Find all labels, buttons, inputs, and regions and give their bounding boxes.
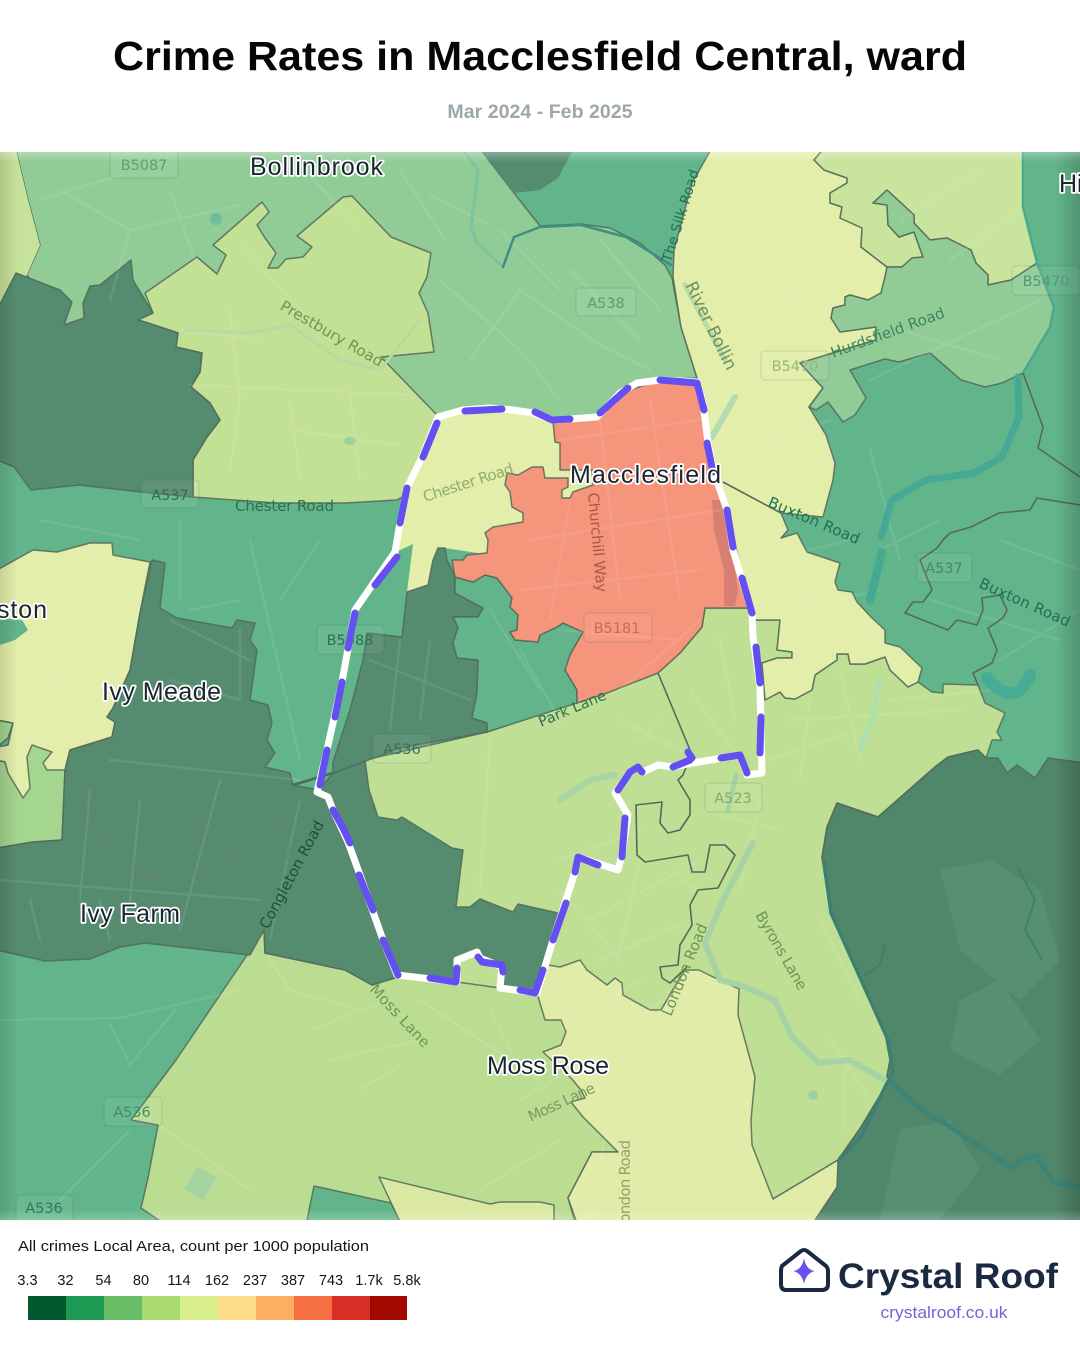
legend: [17, 1238, 421, 1320]
legend scale values: 54: [95, 1273, 112, 1289]
road name labels: River Bollin: [681, 278, 741, 373]
website: crystalroof.co.uk: [880, 1304, 1008, 1322]
road shield labels under ward line: B5087: [121, 158, 167, 174]
area: north-east yellow green: [814, 146, 1037, 285]
legend scale values: 387: [281, 1273, 305, 1289]
legend scale values: 743: [319, 1273, 343, 1289]
road shield labels under ward line: A536: [383, 742, 421, 758]
road shield labels under ward line: B5470: [1023, 274, 1069, 290]
road name labels: Chester Road: [421, 460, 516, 506]
legend scale values: 237: [243, 1273, 267, 1289]
area: top dark green: [483, 152, 572, 193]
road name labels: Moss Lane: [525, 1079, 598, 1126]
road shield labels under ward line: A536: [113, 1105, 151, 1121]
road name labels: Chester Road: [235, 497, 334, 515]
icon: house with star: [781, 1250, 828, 1290]
railway strip: [712, 500, 738, 606]
boundary lines: [85, 373, 1080, 983]
rivers and water: [184, 152, 1080, 1200]
road name labels: Buxton Road: [765, 493, 863, 548]
road shield labels under ward line: A537: [151, 488, 189, 504]
area: south mid green patch: [306, 1185, 399, 1220]
road shield labels under ward line: A523: [714, 791, 752, 807]
road name labels: Moss Lane: [366, 980, 434, 1051]
area: small green blob behind ston: [0, 618, 28, 646]
road name labels: Hurdsfield Road: [828, 304, 947, 362]
edge vignettes: [0, 152, 1080, 1220]
road name labels: London Road: [658, 921, 711, 1018]
legend colour bar: [28, 1296, 407, 1320]
legend scale values: 3.3: [17, 1273, 38, 1289]
area: pale yellow Ivy Meade west: [0, 543, 150, 798]
road shield labels under ward line: A538: [587, 296, 625, 312]
road name labels: Byrons Lane: [752, 908, 811, 993]
area: central green beside red area: [453, 575, 583, 732]
area: large dark green Ivy Farm: [0, 560, 558, 993]
road name labels: Churchill Way: [584, 492, 611, 593]
area: central dark green: [333, 548, 487, 773]
legend title: All crimes Local Area, count per 1000 population: [18, 1238, 369, 1255]
area: south-east lighter patches: [880, 860, 1060, 1220]
area: west dark green: [0, 260, 220, 497]
wordmark: Crystal Roof: [838, 1257, 1058, 1296]
area: south pale yellow: [537, 960, 838, 1226]
area: south pale patch: [379, 1177, 554, 1226]
road shield labels under ward line: B5181: [594, 621, 640, 637]
area: top-left yellow green: [0, 146, 40, 314]
area: ward high crime salmon: [452, 380, 750, 703]
road name labels: [235, 168, 1073, 1230]
place name labels: Moss Rose: [487, 1052, 609, 1080]
road name labels: Park Lane: [536, 688, 609, 731]
road shield labels under ward line: A537: [925, 561, 963, 577]
area: south and centre yellow green: [340, 608, 1005, 1199]
legend scale values: 80: [133, 1273, 149, 1289]
place name labels: Macclesfield: [570, 461, 721, 489]
area: Prestbury yellow green: [138, 196, 437, 503]
road name labels: Congleton Road: [256, 817, 328, 932]
area: ward interior north-west pale yellow: [396, 408, 600, 592]
area: light green lower-left: [0, 720, 65, 848]
place name labels: Ivy Farm: [80, 900, 180, 928]
area: south-east dark green: [811, 750, 1080, 1225]
road name labels: Prestbury Road: [277, 297, 386, 370]
place name labels: Ivy Meade: [102, 678, 221, 706]
subtitle: date range: Mar 2024 - Feb 2025: [447, 101, 633, 123]
road shield labels under ward line: [16, 150, 1080, 1223]
place name labels: Bollinbrook: [250, 153, 384, 181]
legend scale values: 5.8k: [393, 1273, 421, 1289]
road shield labels under ward line: B5088: [327, 633, 373, 649]
road shield labels under ward line: A536: [25, 1201, 63, 1217]
road name labels: The Silk Road: [659, 168, 703, 265]
base area: mid green: [0, 152, 1080, 1220]
legend scale values: 1.7k: [355, 1273, 383, 1289]
ward boundary Macclesfield Central: [317, 380, 762, 993]
map: [0, 152, 1080, 1220]
road shield labels under ward line: B5470: [772, 359, 818, 375]
logo: Crystal Roof: [779, 1248, 1058, 1322]
area: eastern pale yellow: [673, 146, 922, 700]
area: Moss Lane yellow green: [130, 931, 618, 1220]
place name labels: [0, 153, 1080, 1080]
area: north-west light green: [15, 146, 697, 420]
legend scale values: 32: [57, 1273, 74, 1289]
title: Crime Rates in Macclesfield Central, ward: [113, 33, 967, 79]
legend scale values: 162: [205, 1273, 229, 1289]
roads network: [0, 165, 1080, 1220]
legend scale values: [17, 1273, 421, 1289]
legend scale values: 114: [167, 1273, 191, 1289]
area: Hurdsfield light green: [800, 190, 1054, 422]
road name labels: Buxton Road: [976, 574, 1073, 631]
